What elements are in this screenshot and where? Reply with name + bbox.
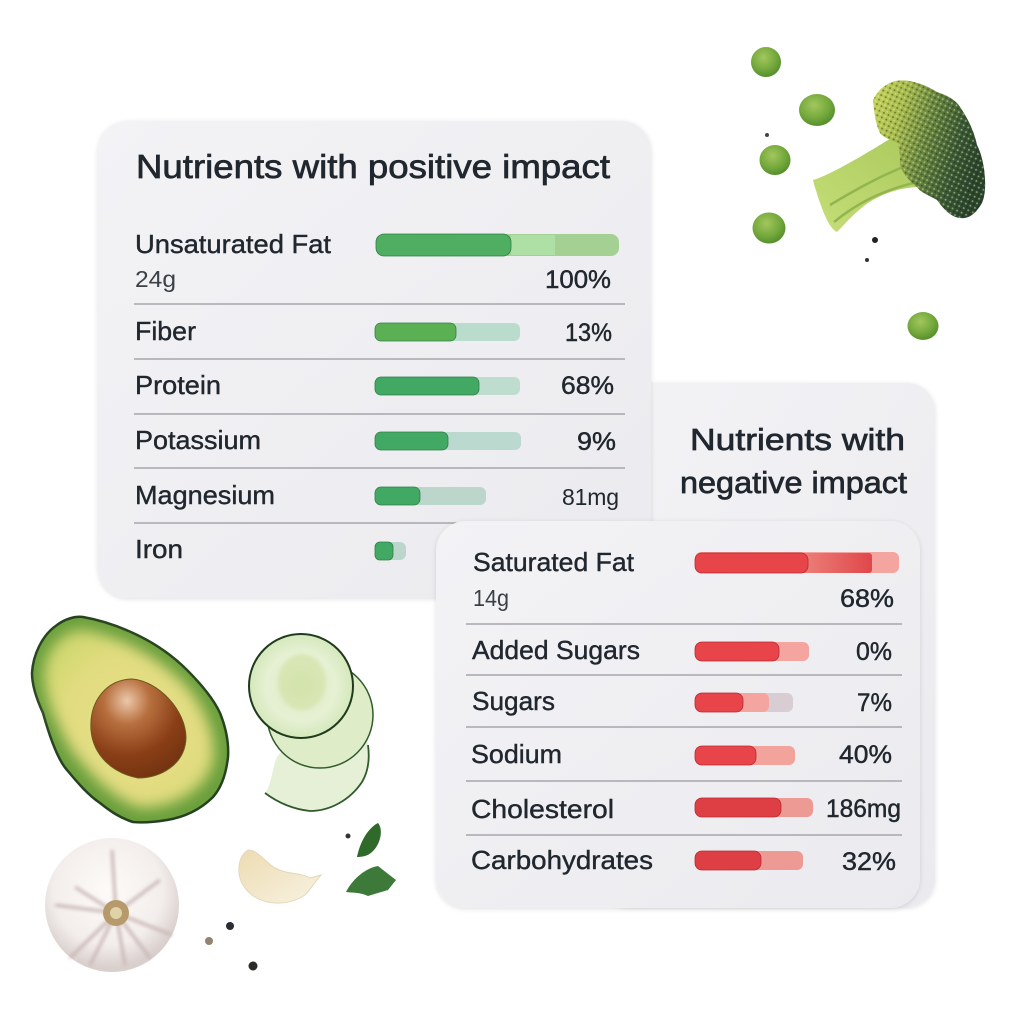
heading: negative impact: Nutrients with [690,422,905,457]
icon: avocado [32,617,228,822]
row: saturated fat: Saturated Fat [473,547,635,577]
icon: broccoli [813,80,985,232]
row: unsaturated fat: Unsaturated Fat [135,229,332,259]
row: protein: 68% [561,372,614,400]
heading: positive impact: Nutrients with positive impact [136,148,610,185]
panel: nutrients with negative impact (back card) [600,383,935,907]
row: cholesterol: 186mg [826,795,901,823]
row: saturated fat: 14g [473,585,509,611]
panel: negative nutrients list [436,521,920,908]
row: added sugars: Added Sugars [472,635,640,665]
icon: herb leaves [346,823,396,896]
icon: peppercorns [205,834,350,970]
row: magnesium: 81mg [562,484,619,510]
icon: peas [751,47,938,340]
row: carbohydrates: Carbohydrates [471,845,653,875]
panel: nutrients with positive impact [98,121,651,598]
row: fiber [135,316,612,347]
row: unsaturated fat [135,229,619,294]
row: magnesium [135,480,619,510]
row: cholesterol [471,794,901,824]
row: unsaturated fat: 24g [135,266,176,292]
row: sugars: 7% [857,689,892,717]
row: sugars [472,686,892,717]
row: carbohydrates: 32% [842,848,896,876]
heading: negative impact: negative impact [680,465,907,500]
row: iron [135,534,406,564]
row: added sugars: 0% [856,638,892,666]
row: unsaturated fat: 100% [545,266,611,294]
row: cholesterol: Cholesterol [471,794,614,824]
icon: cucumber slices [249,634,373,811]
row: magnesium: Magnesium [135,480,275,510]
row: potassium: 9% [577,428,616,456]
row: protein: Protein [135,370,221,400]
row: protein [135,370,614,400]
row: fiber: 13% [565,319,612,347]
row: carbohydrates [471,845,896,876]
row: sodium: Sodium [471,739,562,769]
row: saturated fat: 68% [840,585,894,613]
row: saturated fat [473,547,899,613]
row: potassium: Potassium [135,425,261,455]
row: potassium [135,425,616,456]
row: fiber: Fiber [135,316,196,346]
heading: negative impact [680,422,907,500]
row: sodium [471,739,892,769]
icon: garlic clove [239,850,321,903]
row: sodium: 40% [839,741,892,769]
row: added sugars [472,635,892,666]
icon: garlic bulb [45,838,179,972]
row: sugars: Sugars [472,686,555,716]
row: iron: Iron [135,534,183,564]
